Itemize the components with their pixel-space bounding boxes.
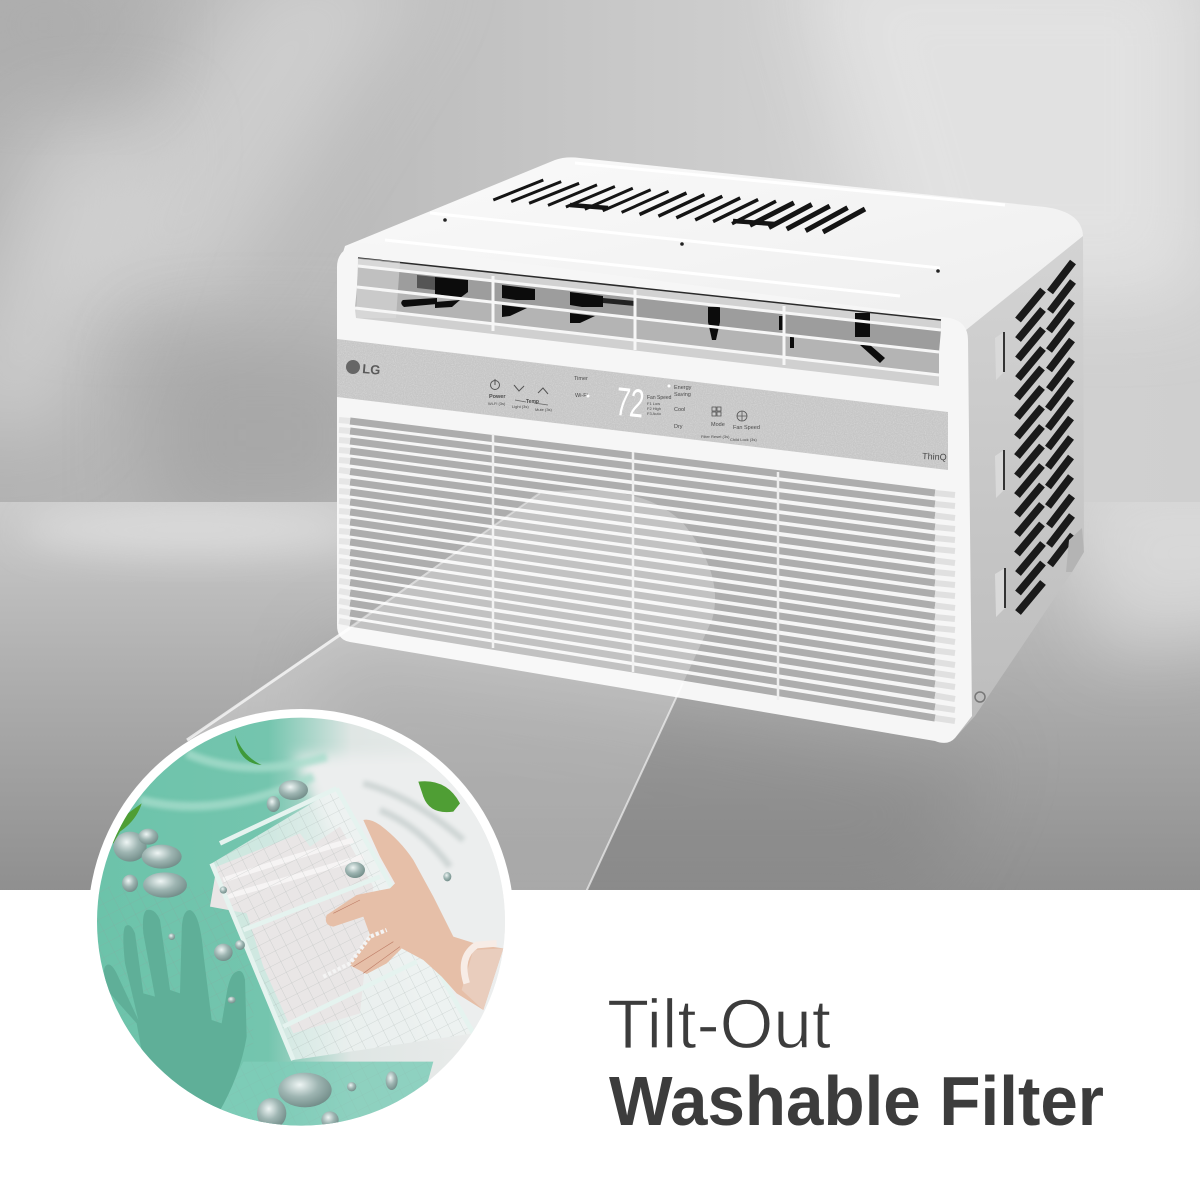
Washable Filter: Washable Filter xyxy=(609,1062,1104,1140)
mode labels: Saving xyxy=(674,392,691,398)
temperature display: 72 xyxy=(614,380,646,427)
ThinQ label: ThinQ xyxy=(922,451,947,462)
mode labels: F3 Auto xyxy=(647,411,662,416)
mode labels: Cool xyxy=(674,407,685,413)
power and temperature controls: Wi-Fi (3s) xyxy=(488,401,506,406)
power and temperature controls: Temp xyxy=(526,399,539,405)
mode labels: Fan Speed xyxy=(647,395,672,401)
circle inset: washable filter in water xyxy=(88,709,514,1135)
leaf left xyxy=(112,804,142,844)
mode labels: F2 High xyxy=(647,406,661,411)
front face body xyxy=(337,243,972,743)
mode labels: Energy xyxy=(674,385,692,391)
background: grey wall with light streaks xyxy=(0,0,1200,530)
mode and fan buttons: Child Lock (3s) xyxy=(730,437,757,442)
right hand xyxy=(326,820,503,1010)
power and temperature controls: Mute (3s) xyxy=(535,407,553,412)
dirty pleated patch xyxy=(210,827,373,1033)
mode labels: Dry xyxy=(674,424,683,430)
upper air outlet louvers xyxy=(355,258,941,386)
background: concrete floor xyxy=(0,470,1200,892)
air conditioner unit xyxy=(337,157,1084,743)
left hand underwater xyxy=(104,910,247,1120)
LG logo xyxy=(346,360,381,378)
mode and fan buttons: Fan Speed xyxy=(733,425,760,431)
power and temperature controls: Power xyxy=(489,394,506,400)
white sheet folds xyxy=(289,748,412,884)
grid on lower left xyxy=(93,887,253,1047)
leaf right xyxy=(418,781,460,812)
power and temperature controls: Wi-Fi xyxy=(575,393,588,399)
mode and fan buttons xyxy=(701,407,760,442)
LG logo: LG xyxy=(362,361,381,378)
headline xyxy=(607,985,1104,1140)
filter frame and ribs xyxy=(212,788,473,1060)
power and temperature controls xyxy=(488,376,590,412)
control panel xyxy=(337,335,949,475)
mode labels: F1 Low xyxy=(647,401,660,406)
power and temperature controls: Light (3s) xyxy=(512,404,529,409)
side face with rear vents xyxy=(955,220,1084,738)
top face with exhaust slots xyxy=(340,157,1083,330)
filter mesh xyxy=(212,799,410,1060)
Tilt-Out: Tilt-Out xyxy=(607,985,831,1063)
white ring xyxy=(88,709,514,1135)
light beam projecting from filter circle to unit xyxy=(187,490,715,892)
leaf top xyxy=(235,735,262,765)
mode and fan buttons: Mode xyxy=(711,422,725,428)
mode labels xyxy=(647,384,692,430)
bottom water panel xyxy=(220,1062,434,1126)
power and temperature controls: Timer xyxy=(574,376,588,382)
bracelet xyxy=(464,943,497,983)
lower white area xyxy=(0,890,1200,1200)
splash particles xyxy=(323,930,387,977)
mode and fan buttons: Filter Reset (3s) xyxy=(701,434,730,439)
front intake grille xyxy=(339,420,955,721)
bubble clusters xyxy=(113,780,451,1129)
water and sheet background xyxy=(97,718,471,1126)
